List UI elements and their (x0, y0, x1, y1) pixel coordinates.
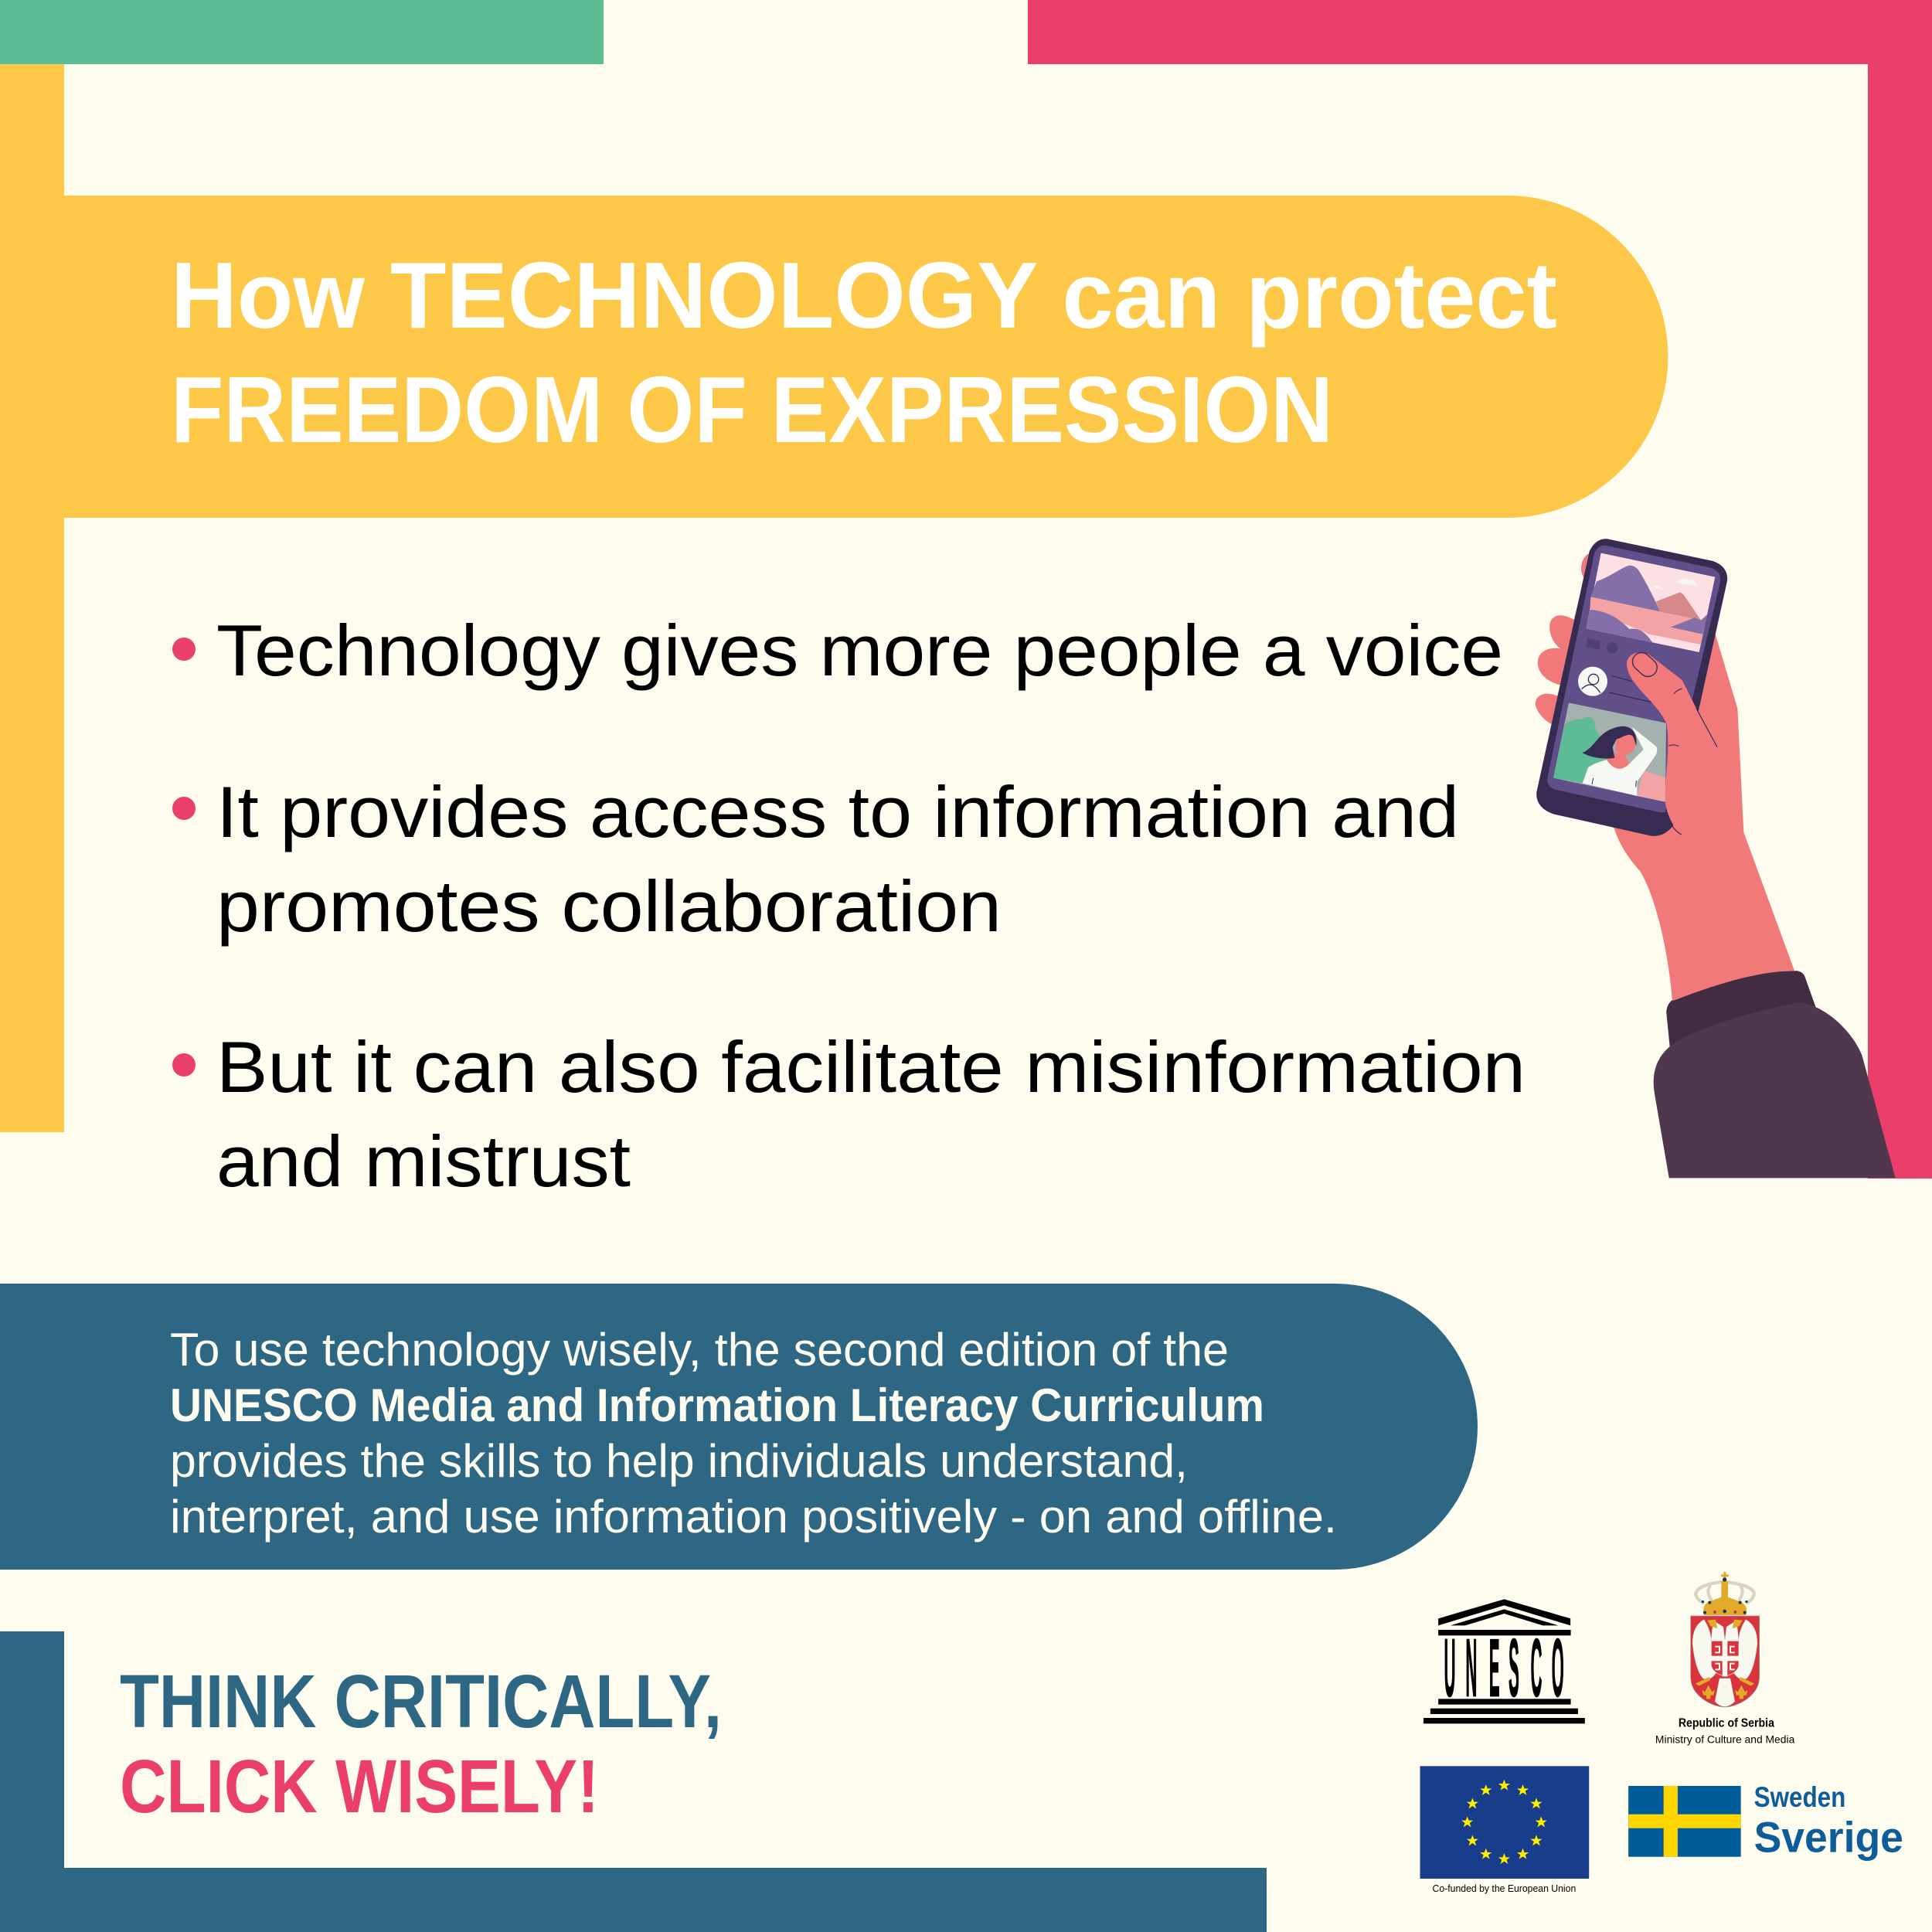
bullet 3: But it can also facilitate misinformation (216, 1026, 1526, 1107)
phone and hand (1536, 539, 1794, 1001)
Serbia caption: Ministry of Culture and Media (1655, 1733, 1795, 1746)
EU caption: Co-funded by the European Union (1433, 1883, 1576, 1894)
bullet 2: promotes collaboration (216, 866, 1002, 947)
logo: UNESCO (1423, 1599, 1585, 1723)
screen bottom photo: woman (1553, 702, 1666, 802)
inner shield with cross (1711, 1641, 1739, 1676)
call-out panel: curriculum (0, 1284, 1478, 1570)
fleurs and talons (1696, 1677, 1754, 1699)
title line 1: How TECHNOLOGY can protect (171, 243, 1557, 348)
logo: Sweden: Sweden (1754, 1781, 1845, 1813)
bullet 2: It provides access to information and (216, 771, 1459, 852)
screen toolbar icons (1586, 638, 1618, 654)
bullet 3 (172, 1026, 1526, 1202)
frame: blue bottom left bar (0, 1631, 1267, 1932)
bullet 2 (172, 771, 1459, 947)
logo: Sweden (1628, 1781, 1903, 1862)
logo: European Union flag (1420, 1766, 1589, 1894)
thumbnail (1629, 649, 1661, 680)
frame: top green bar (0, 0, 604, 64)
title line 2: FREEDOM OF EXPRESSION (171, 357, 1333, 462)
logos (1420, 1599, 1903, 1894)
phone body (1536, 539, 1727, 836)
phone screen (1547, 546, 1720, 813)
screen top photo: landscape (1586, 553, 1715, 652)
profile avatar icon (1578, 667, 1607, 696)
bullet list (172, 610, 1526, 1202)
call-out line 4: interpret, and use information positively - on and offline. (170, 1491, 1337, 1543)
screen text lines (1609, 675, 1656, 703)
title banner (64, 196, 1668, 518)
shield (1691, 1616, 1760, 1707)
logo: UNESCO: UNESCO (1444, 1623, 1564, 1714)
thumb (1627, 652, 1743, 836)
eagle (1692, 1620, 1757, 1706)
bullet 3: and mistrust (216, 1121, 631, 1202)
slogan: THINK CRITICALLY, (120, 1659, 722, 1743)
sleeve and cuff (1654, 971, 1896, 1178)
slogan (120, 1659, 722, 1828)
Serbia caption (1655, 1716, 1795, 1746)
call-out line 2, bold: UNESCO Media and Information Literacy Curriculum (170, 1379, 1264, 1431)
fingers and arm (1536, 554, 1794, 1001)
Serbia caption: Republic of Serbia (1679, 1716, 1775, 1730)
frame: pink top and right bar (1028, 0, 1932, 1179)
bullet 1: Technology gives more people a voice (216, 610, 1503, 691)
call-out line 3: provides the skills to help individuals understand, (170, 1435, 1188, 1487)
slogan: CLICK WISELY! (120, 1744, 599, 1828)
hand crease lines (1668, 689, 1717, 835)
illustration: hand holding phone (1536, 539, 1896, 1178)
logo: Republic of Serbia coat of arms (1691, 1572, 1760, 1707)
frame: yellow left bar (0, 64, 64, 1132)
crown (1696, 1572, 1754, 1615)
call-out line 1: To use technology wisely, the second edition of the (170, 1324, 1229, 1376)
